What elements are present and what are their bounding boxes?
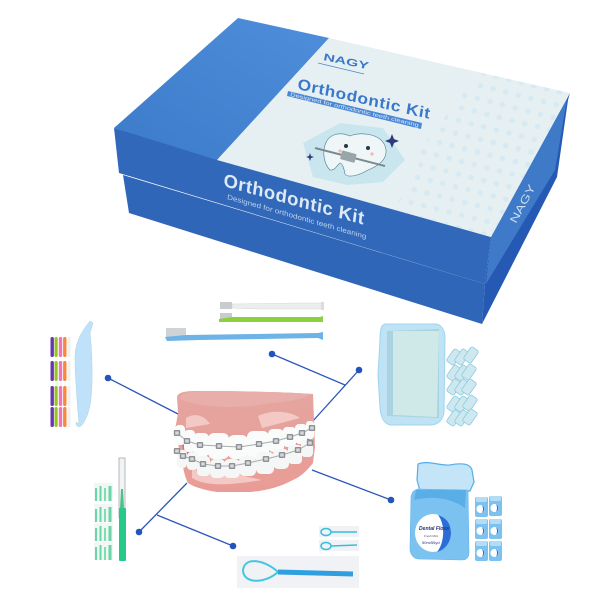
toothbrushes	[165, 302, 324, 341]
braces model	[174, 391, 315, 492]
archwires	[177, 428, 312, 447]
box base front	[123, 175, 485, 324]
floss label disc: Fresh Mint	[424, 534, 438, 538]
colour strips	[50, 337, 70, 427]
body	[410, 489, 469, 560]
box lid front	[114, 128, 491, 284]
dental floss container	[410, 463, 474, 560]
floss label disc: 50m/55yd	[422, 540, 440, 545]
dot pattern	[395, 70, 570, 237]
top subtitle band: Designed for orthodontic teeth cleaning	[290, 92, 419, 129]
brand: NAGY: NAGY	[322, 52, 370, 72]
front title: Orthodontic Kit	[223, 169, 366, 229]
green brush	[219, 313, 323, 322]
wax case	[378, 324, 445, 425]
box right side	[482, 93, 570, 324]
box lid top white label	[217, 38, 570, 237]
box: orthodontic kit	[114, 18, 570, 324]
wax pieces	[446, 346, 479, 427]
mini floss boxes	[475, 496, 502, 561]
cheeks	[338, 149, 342, 153]
gum shadow	[182, 432, 310, 460]
bracket	[340, 150, 357, 163]
tooth badge	[303, 123, 405, 185]
gums	[175, 391, 315, 492]
white brush	[220, 302, 324, 310]
large threader pack	[237, 556, 359, 588]
connector lines	[105, 351, 394, 549]
floss label disc: Dental Floss	[419, 526, 450, 532]
tooth	[324, 134, 386, 176]
gum highlights	[186, 412, 300, 484]
brackets	[174, 425, 315, 469]
blue brush	[165, 328, 323, 341]
sparkles	[385, 134, 399, 148]
lid	[417, 463, 474, 491]
side brand: NAGY	[508, 182, 539, 225]
refills	[94, 483, 113, 560]
brush handle	[119, 458, 126, 561]
top title: Orthodontic Kit	[296, 76, 432, 123]
archwire	[315, 148, 385, 166]
upper teeth	[175, 421, 314, 459]
front subtitle: Designed for orthodontic teeth cleaning	[227, 194, 367, 241]
top subtitle band	[287, 91, 422, 129]
lower teeth	[177, 440, 313, 478]
interdental brush set	[94, 458, 126, 561]
small threader packs	[319, 526, 359, 551]
eyes	[344, 144, 348, 148]
palate	[178, 391, 312, 407]
floss threader	[75, 321, 93, 427]
floss label disc	[415, 514, 451, 552]
brand underline	[318, 63, 364, 74]
box lid top blue band	[114, 18, 329, 160]
